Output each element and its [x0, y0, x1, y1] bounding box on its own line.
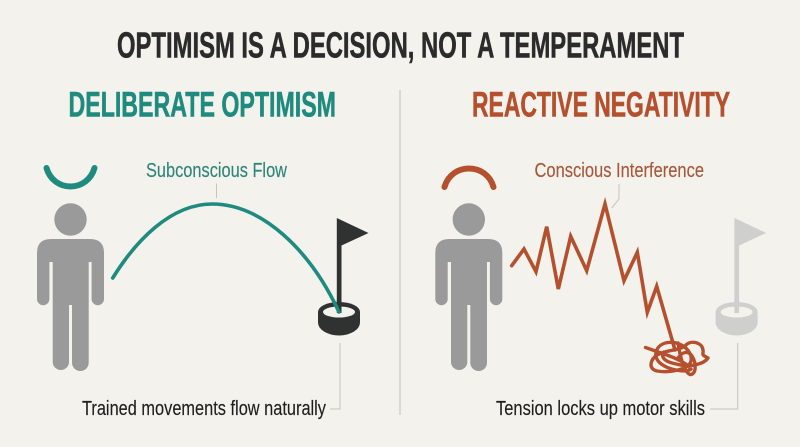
icon: person	[435, 203, 502, 371]
icon: flag and hole	[318, 218, 368, 335]
panel: reactive negativity	[435, 86, 766, 420]
label: trained movements: Trained movements flow naturally	[82, 398, 326, 420]
icon: tangled scribble	[646, 342, 708, 375]
label: subconscious flow: Subconscious Flow	[146, 160, 287, 182]
heading: deliberate optimism: DELIBERATE OPTIMISM	[68, 86, 336, 124]
panel: deliberate optimism	[37, 86, 368, 420]
icon: frown arc	[444, 168, 494, 187]
icon: smile arc	[46, 168, 94, 186]
arrow: smooth ball trajectory	[113, 204, 339, 312]
label: conscious interference: Conscious Interference	[534, 160, 704, 182]
label: tension locks up motor skills: Tension locks up motor skills	[496, 398, 705, 420]
icon: faded flag and hole	[716, 218, 766, 335]
arrow: jagged trajectory	[512, 204, 675, 350]
icon: person	[37, 203, 104, 371]
